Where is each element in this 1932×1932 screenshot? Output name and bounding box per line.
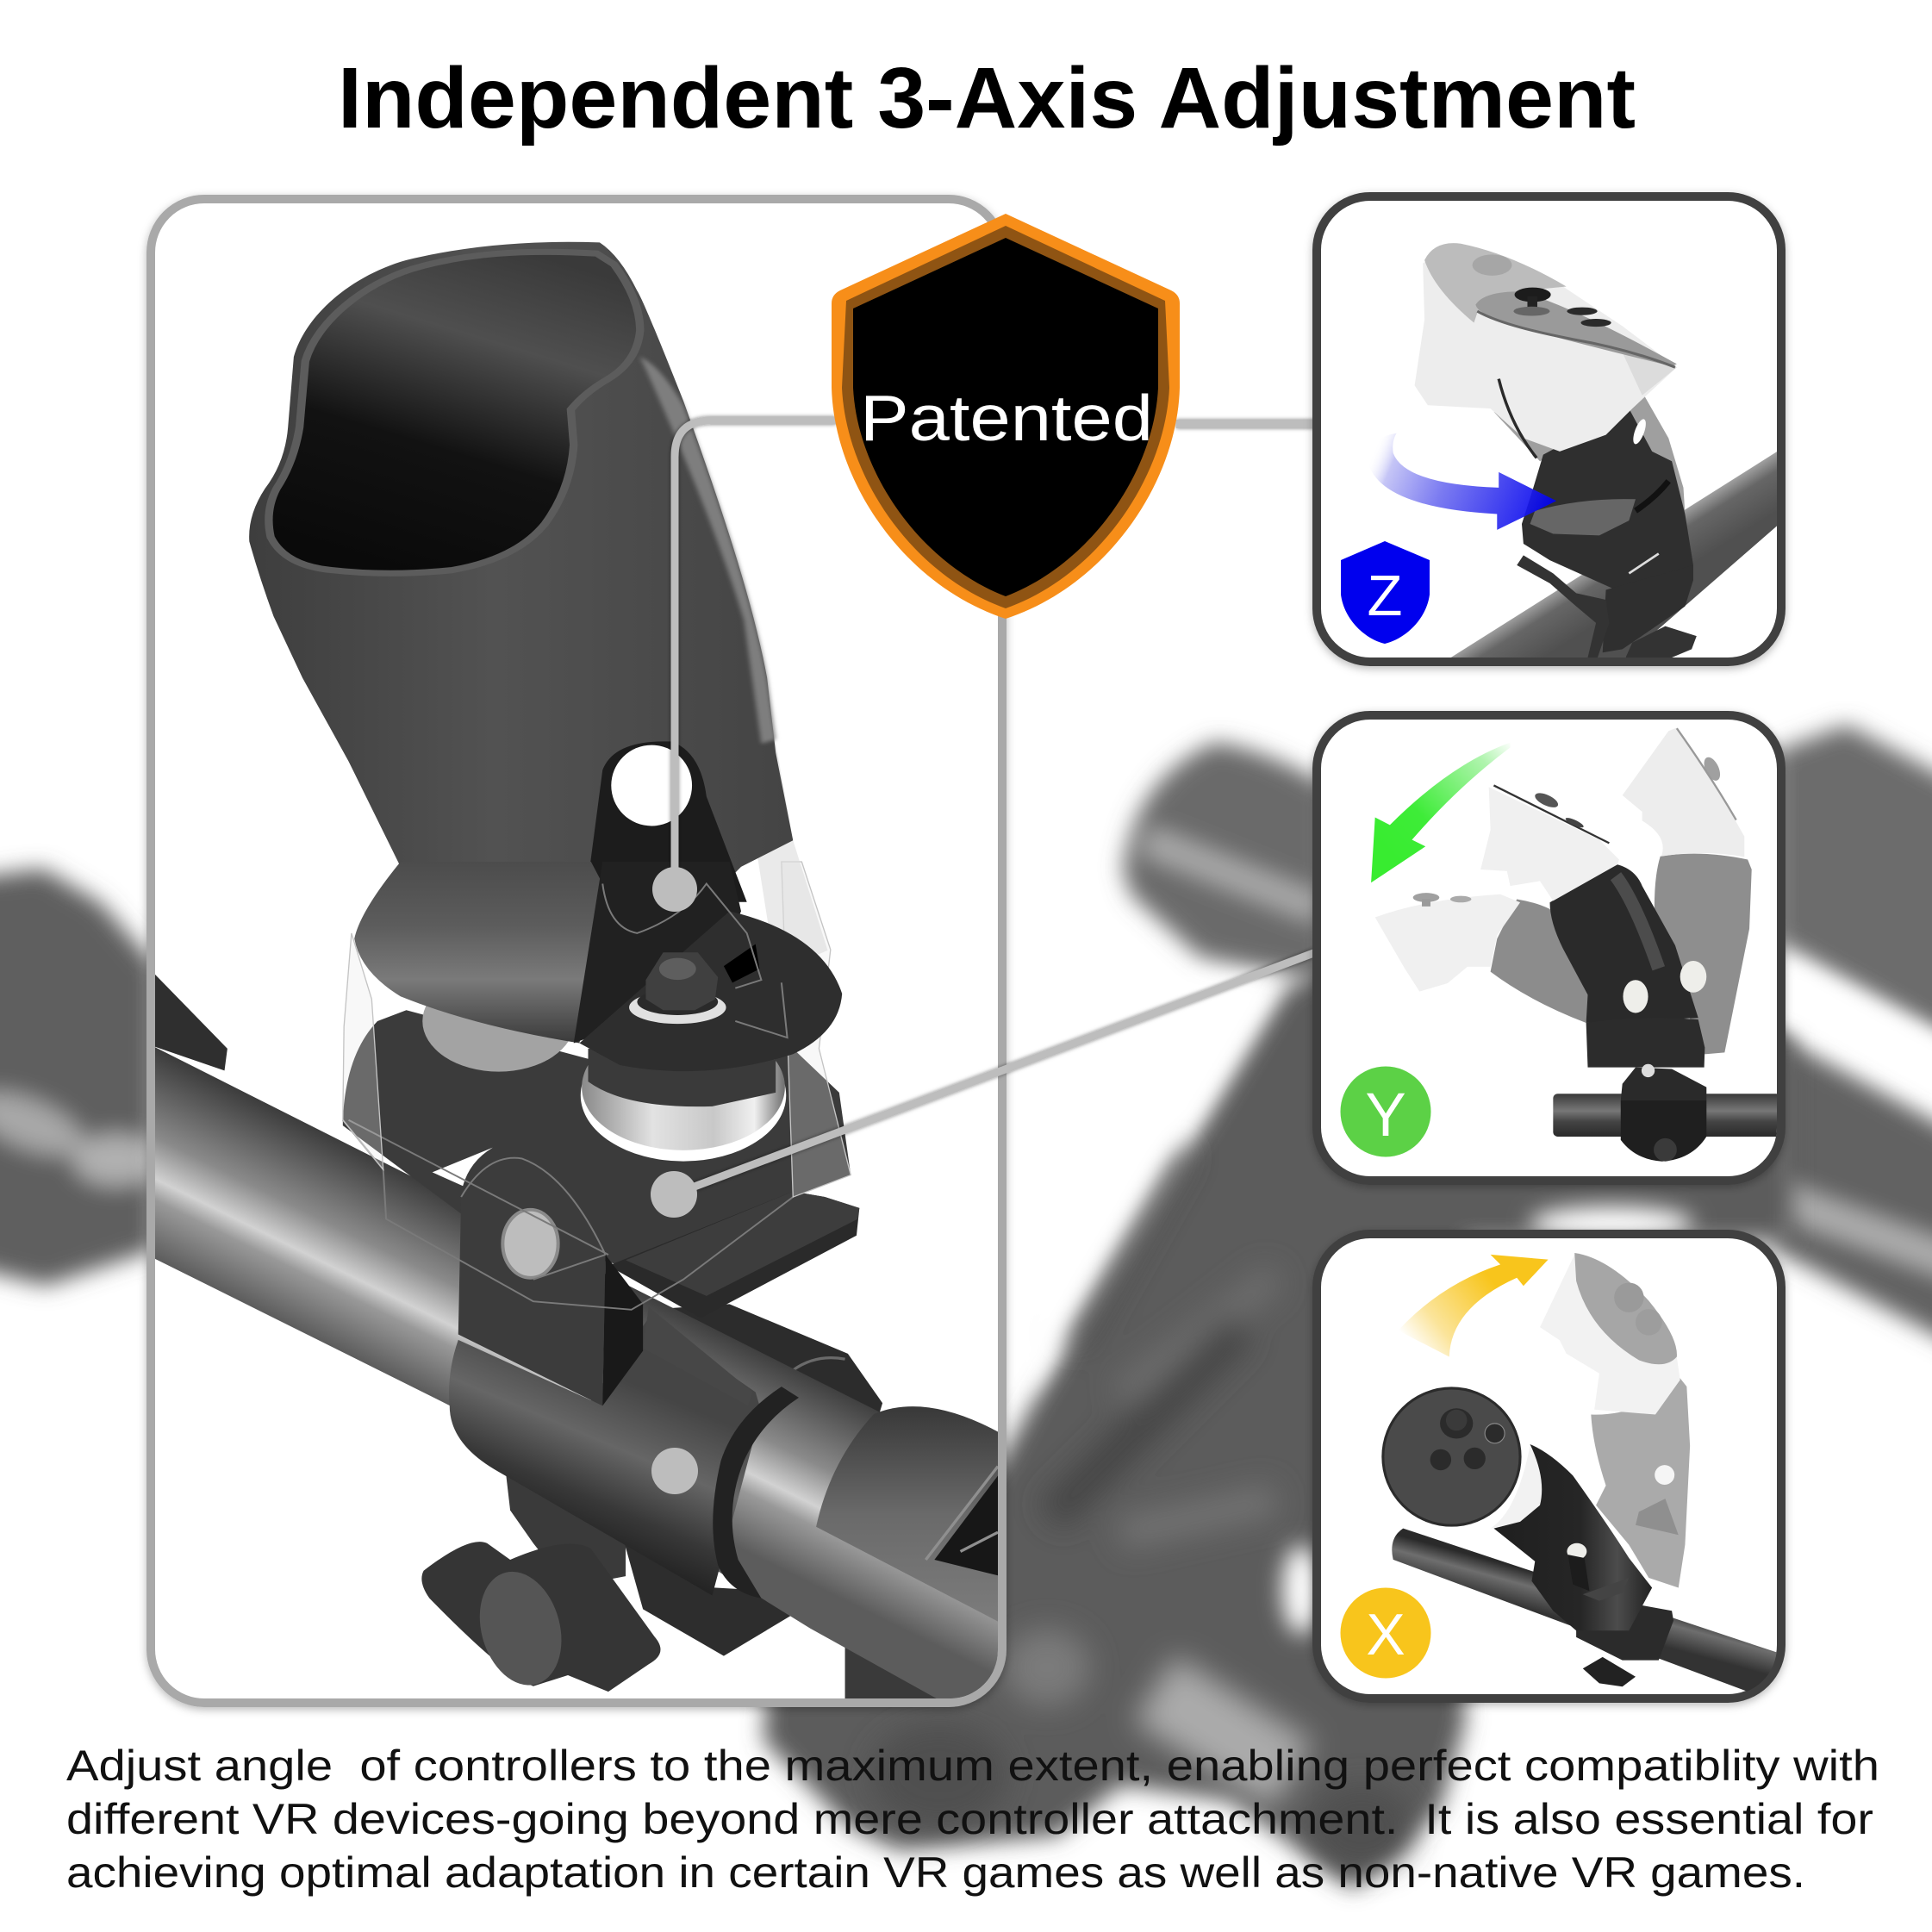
panel frame (1317, 715, 1781, 1181)
clamp sleeve (449, 1318, 761, 1595)
callout dot: X (651, 1448, 698, 1494)
connector: Y axis line (674, 952, 1316, 1194)
axis badge: X (1341, 1587, 1430, 1679)
panel frame (1317, 1234, 1781, 1698)
background: right lower band (1758, 1034, 1932, 1360)
description text: different VR devices-going beyond mere controller attachment. It is also essential for (66, 1795, 1873, 1843)
arrow: yellow tilt (1398, 1255, 1549, 1357)
shield core (853, 238, 1158, 596)
product: clamp mount illustration (153, 242, 1053, 1763)
description text: achieving optimal adaptation in certain VR games as well as non-native VR games. (66, 1848, 1805, 1897)
background: central mass highlights (870, 1146, 1413, 1870)
background: upper tube end (1123, 742, 1327, 982)
rail clamp (1603, 565, 1693, 652)
clear shell (343, 862, 851, 1197)
panel frame (151, 199, 1002, 1703)
letter X: X (1366, 1602, 1405, 1667)
illustration: controller tilting on Y axis (1371, 727, 1780, 1162)
block (343, 1010, 851, 1268)
panel: main product close-up (151, 199, 1053, 1763)
cup opening (269, 252, 640, 573)
post and hole (585, 741, 747, 902)
arrow: green tilt (1371, 743, 1511, 882)
title: Independent 3-Axis Adjustment (338, 50, 1636, 146)
pivot screw (502, 1210, 558, 1278)
axis badge: Z (1341, 541, 1430, 644)
description text: Adjust angle of controllers to the maximum extent, enabling perfect compatiblity with (66, 1742, 1879, 1790)
ghost and front controller (1415, 244, 1677, 452)
panel frame (1317, 196, 1781, 662)
illustration: controller rotating on Z axis (1368, 243, 1778, 658)
grip and swivel base (1522, 408, 1693, 590)
controller disc (1383, 1388, 1520, 1525)
shield shape (832, 214, 1180, 619)
axis badge: Y (1341, 1067, 1430, 1156)
panel: X axis (1317, 1234, 1781, 1698)
far sleeve (816, 1406, 1000, 1623)
blue shield (1341, 541, 1430, 644)
arrow: blue rotation (1368, 433, 1556, 530)
badge label: Patented (860, 382, 1153, 454)
background: white gaps (1017, 982, 1932, 1635)
letter Z: Z (1368, 564, 1402, 628)
callout dot: Y (651, 1171, 697, 1218)
panel: Z axis (1317, 196, 1781, 662)
grip cup (249, 242, 827, 972)
outline lines (343, 1120, 793, 1310)
background: right upper band (1775, 725, 1932, 1058)
yellow circle (1341, 1587, 1430, 1679)
bearings (422, 1007, 569, 1072)
pivot arm (458, 1213, 605, 1405)
callout dot: Z (652, 867, 697, 912)
green circle (1341, 1067, 1430, 1156)
rail (155, 1047, 998, 1698)
description text (66, 1742, 1879, 1897)
letter Y: Y (1365, 1081, 1406, 1150)
shield inner rim (842, 226, 1169, 608)
panel: Y axis (1317, 715, 1781, 1181)
background: left blob (0, 869, 159, 1286)
connector: X axis line (675, 1467, 1317, 1475)
blurred background product image (0, 725, 1932, 1889)
illustration: controller tilting on X axis (1383, 1253, 1780, 1692)
background: central mass (763, 965, 1792, 1889)
connector: Z axis line from callout dot to Z panel (675, 420, 1317, 889)
badge: Patented shield (832, 214, 1180, 619)
rail (1392, 1529, 1780, 1692)
knob (421, 1542, 660, 1692)
lower assembly: rail and clamp (155, 861, 998, 1698)
base plate and bolt (354, 862, 842, 1071)
